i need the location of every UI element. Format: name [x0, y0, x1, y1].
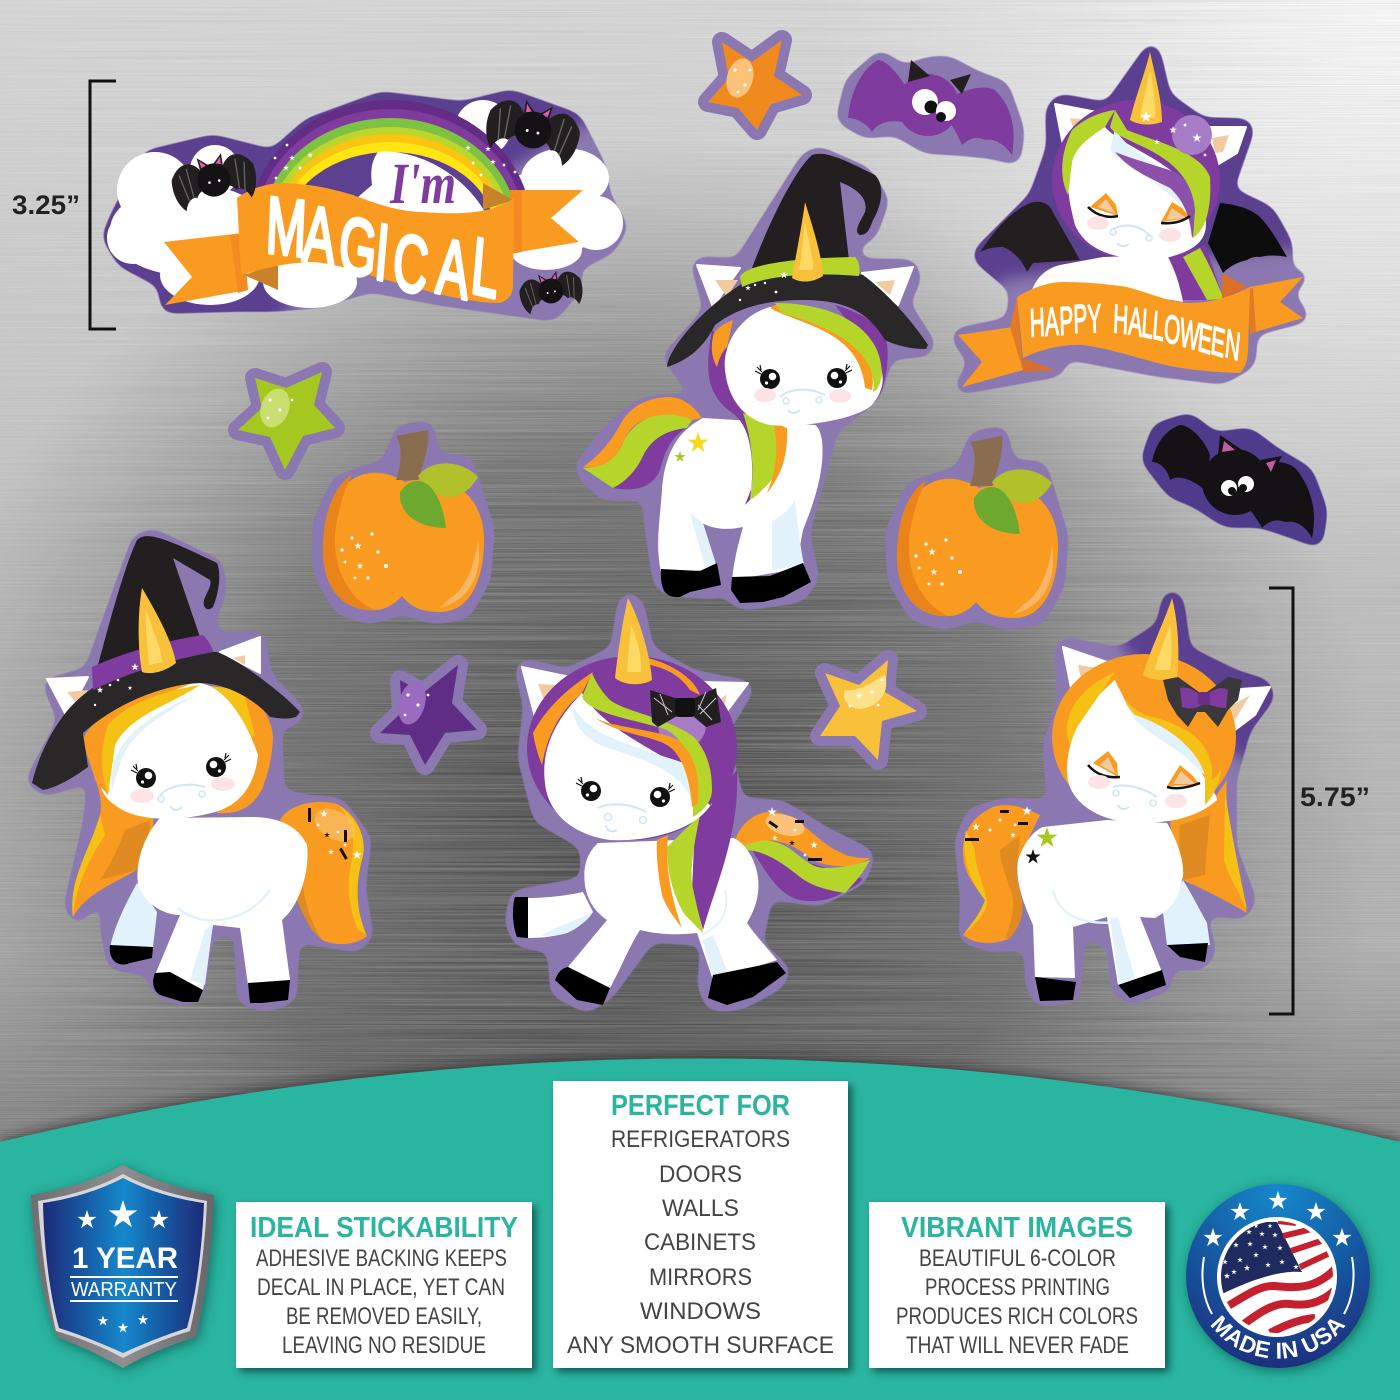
text box: vibrant images: PRODUCES RICH COLORS — [896, 1303, 1138, 1330]
text box: perfect for: DOORS — [659, 1161, 742, 1188]
ears — [522, 667, 748, 730]
sticker: green star — [238, 372, 335, 470]
horn — [1130, 52, 1162, 124]
text box: vibrant images: PROCESS PRINTING — [925, 1274, 1110, 1301]
shield text: 1 year: 1 YEAR — [72, 1242, 178, 1275]
ears — [1063, 647, 1270, 730]
body and legs — [527, 838, 777, 988]
ears — [47, 637, 260, 717]
I'm script text: I'm — [389, 151, 456, 216]
flag — [1221, 1221, 1333, 1333]
horn — [1143, 598, 1178, 680]
body and legs — [110, 817, 308, 990]
sticker: unicorn with bat bow, bottom right — [957, 591, 1273, 1004]
badge arcs — [1202, 1257, 1354, 1314]
tail — [963, 805, 1040, 943]
icon: bat left — [168, 147, 260, 213]
sticker: black bat with googly eyes — [1143, 415, 1325, 546]
shield rules and warranty text: WARRANTY — [71, 1279, 177, 1301]
ears — [697, 265, 913, 307]
hooves — [661, 563, 811, 603]
tail — [583, 397, 702, 489]
text box: perfect for: WINDOWS — [640, 1298, 761, 1325]
text box: ideal stickability: LEAVING NO RESIDUE — [282, 1332, 486, 1359]
text box: perfect for: CABINETS — [644, 1229, 756, 1256]
back mane — [1170, 780, 1247, 913]
text box: perfect for: MIRRORS — [649, 1264, 752, 1291]
dimension bracket: 3.25 inches: 3.25” — [12, 190, 80, 220]
text box: ideal stickability: BE REMOVED EASILY, — [286, 1303, 482, 1330]
horn — [615, 598, 652, 684]
spider web bow — [650, 688, 721, 727]
text box: ideal stickability: IDEAL STICKABILITY — [250, 1212, 518, 1244]
head — [85, 680, 258, 819]
sticker: Happy Halloween unicorn — [953, 43, 1310, 392]
sticker: orange star — [708, 40, 802, 130]
tail — [735, 807, 870, 901]
sticker: pumpkin right — [888, 428, 1066, 628]
badge stars — [1203, 1191, 1352, 1246]
mane — [527, 656, 737, 933]
banner ribbon — [164, 183, 583, 305]
mane cap — [1052, 654, 1236, 820]
sticker: purple star — [380, 665, 477, 765]
text box: perfect for: PERFECT FOR — [611, 1090, 790, 1122]
clouds back — [107, 100, 623, 308]
icon: warranty shield — [31, 1165, 214, 1368]
mane and body — [1032, 100, 1224, 302]
tail — [280, 802, 367, 944]
back mane — [72, 685, 273, 917]
witch hat — [32, 536, 300, 790]
mane — [708, 320, 787, 505]
body — [658, 418, 823, 580]
text box: vibrant images: VIBRANT IMAGES — [901, 1212, 1133, 1244]
text box: vibrant images: BEAUTIFUL 6-COLOR — [919, 1245, 1116, 1272]
icon: made in USA badge — [1182, 1180, 1378, 1378]
text box: perfect for: ANY SMOOTH SURFACE — [567, 1332, 834, 1359]
head — [725, 303, 888, 426]
sticker: pumpkin left — [314, 422, 492, 622]
hooves — [513, 897, 786, 1005]
witch hat — [667, 154, 928, 367]
teal footer band — [0, 1058, 1400, 1400]
text box: perfect for — [553, 1081, 848, 1368]
ribbon — [958, 273, 1303, 387]
sticker: purple bat — [838, 52, 1022, 163]
head — [544, 673, 712, 840]
text box: perfect for: WALLS — [662, 1195, 739, 1222]
ears — [1055, 104, 1246, 165]
text box: ideal stickability: ADHESIVE BACKING KEEPS — [256, 1245, 507, 1272]
sticker: unicorn with bow, bottom centre — [507, 593, 873, 1011]
dimension bracket: 5.75 inches: 5.75” — [1300, 782, 1370, 812]
icon: bat bottom right — [516, 266, 586, 316]
bat wings — [980, 202, 1287, 273]
sticker: I'm Magical rainbow banner — [103, 90, 626, 321]
rainbow — [256, 100, 525, 214]
body and legs — [1017, 820, 1210, 985]
text box: perfect for: REFRIGERATORS — [611, 1126, 790, 1153]
hooves — [110, 945, 290, 1003]
sticker: witch hat unicorn top centre — [577, 149, 933, 608]
dimension bracket: 5.75 inches — [1269, 588, 1370, 1014]
sticker: yellow star — [820, 660, 917, 760]
text box: ideal stickability: DECAL IN PLACE, YET CAN — [257, 1274, 505, 1301]
Happy Halloween text: HAPPY HALLOWEEN — [1029, 295, 1242, 370]
shield stars — [77, 1200, 169, 1332]
horn — [139, 588, 176, 673]
MAGICAL text: MAGICAL — [264, 179, 502, 316]
rump stars — [674, 432, 708, 462]
bat-wing glitter bow — [1163, 677, 1242, 727]
closed eyes and face — [1087, 193, 1190, 246]
horn — [792, 202, 823, 282]
icon: bat top right — [481, 92, 585, 168]
hooves — [1035, 943, 1208, 1001]
head — [1067, 665, 1230, 823]
sticker: witch hat unicorn bottom left — [27, 531, 371, 1010]
made in USA curved text: MADE IN USA — [1210, 1315, 1346, 1359]
text box: vibrant images: THAT WILL NEVER FADE — [906, 1332, 1129, 1359]
text box: ideal stickability — [236, 1202, 532, 1368]
text box: vibrant images — [869, 1202, 1165, 1368]
dimension bracket: 3.25 inches — [12, 81, 116, 329]
